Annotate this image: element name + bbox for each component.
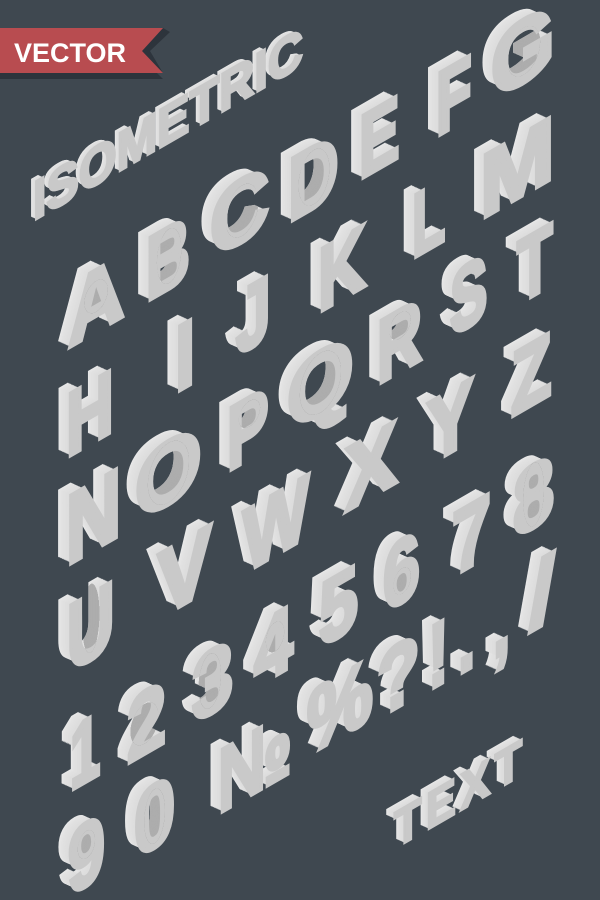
letter F: F [436, 36, 472, 157]
digit 7: 7 [452, 474, 491, 597]
numero sign: № [218, 691, 292, 834]
letter I: I [175, 298, 195, 413]
letter T: T [517, 204, 553, 325]
letter Q: Q [287, 314, 354, 453]
digit 8: 8 [513, 435, 554, 559]
digit 4: 4 [254, 585, 293, 708]
letter K: K [318, 205, 366, 333]
letter C: C [210, 146, 269, 280]
letter U: U [67, 560, 115, 694]
letter L: L [412, 160, 445, 279]
letter S: S [450, 235, 487, 357]
digit 3: 3 [192, 620, 233, 744]
percent sign: % [307, 638, 373, 776]
letter O: O [135, 404, 202, 543]
slash: / [529, 536, 555, 651]
letter V: V [158, 504, 212, 639]
question mark: ? [377, 614, 420, 739]
letter Z: Z [511, 313, 551, 437]
letter Y: Y [427, 359, 474, 486]
letter N: N [66, 445, 121, 587]
digit 6: 6 [383, 512, 420, 633]
ribbon: VECTOR banner: VECTOR [14, 38, 126, 68]
letter H: H [66, 350, 114, 478]
letter A: A [68, 235, 124, 368]
digit 0: 0 [134, 755, 175, 879]
exclamation mark: ! [428, 599, 449, 711]
period: . [458, 585, 475, 695]
ribbon: VECTOR banner [0, 28, 170, 79]
word TEXT: TEXT [394, 727, 526, 861]
letter R: R [377, 279, 422, 405]
digit 5: 5 [319, 545, 358, 668]
letter B: B [146, 196, 190, 322]
digit 2: 2 [127, 661, 166, 784]
letter P: P [227, 368, 269, 492]
letter W: W [243, 456, 309, 594]
letter M: M [480, 97, 555, 240]
digit 1: 1 [70, 693, 100, 811]
letter J: J [236, 256, 271, 376]
letter D: D [288, 114, 339, 243]
letter E: E [359, 76, 400, 200]
letter X: X [345, 402, 397, 532]
heading: ISOMETRIC: ISOMETRIC [33, 16, 303, 233]
comma: , [493, 569, 510, 679]
